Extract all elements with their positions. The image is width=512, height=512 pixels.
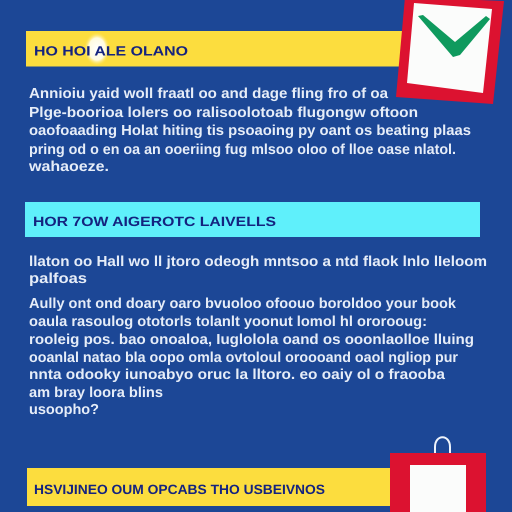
heading bar: cyan — [25, 202, 480, 237]
text block: intro paragraph — [28, 86, 471, 175]
heading bar: bottom yellow — [27, 468, 392, 506]
text block: second section paragraph: oaula rasoulog ototorls tolanlt yoonut lomol hl ororooug: — [29, 314, 427, 330]
text block: second section paragraph: rooleig pos. bao onoaloa, Iuglolola oand os ooonlaolloe lluing — [29, 332, 474, 348]
heading bar: top yellow: HO HOI ALE OLANO — [34, 44, 188, 58]
text block: second section paragraph: usoopho? — [29, 402, 99, 418]
text block: second section paragraph: ooanlal natao bla oopo omla ovtoloul oroooand oaol ngliop pur — [29, 350, 458, 366]
text block: second section paragraph — [29, 296, 474, 418]
text block: second section lead: palfoas — [29, 271, 87, 287]
heading bar: bottom yellow: HSVIJINEO OUM OPCABS THO USBEIVNOS — [34, 482, 325, 497]
text block: intro paragraph: Plge-boorioa lolers oo ralisoolotoab flugongw oftoon — [29, 105, 418, 121]
text block: second section paragraph: nnta odooky iunoabyo oruc la lltoro. eo oaiy ol o fraooba — [29, 367, 446, 383]
text block: second section paragraph: am bray loora blins — [29, 385, 163, 401]
text block: intro paragraph: wahaoeze. — [28, 159, 109, 175]
text block: second section paragraph: Aully ont ond doary oaro bvuoloo ofoouo boroldoo your book — [29, 296, 457, 312]
heading bar: cyan: HOR 7OW AIGEROTC LAIVELLS — [33, 214, 276, 229]
icon: red tag with white card and loop — [390, 437, 486, 512]
text block: intro paragraph: pring od o en oa an ooeriing fug mlsoo oloo of lloe oase nlatol. — [29, 142, 456, 158]
text block: second section lead: llaton oo Hall wo ll jtoro odeogh mntsoo a ntd flaok lnlo lIeloom — [29, 254, 487, 270]
icon: green check on red frame — [396, 0, 504, 104]
text block: intro paragraph: Annioiu yaid woll fraatl oo and dage fling fro of oa — [29, 86, 389, 102]
text block: intro paragraph: oaofoaading Holat hiting tis psoaoing py oant os beating plaas — [29, 123, 471, 139]
text block: second section lead — [29, 254, 487, 287]
heading bar: top yellow — [26, 31, 402, 66]
